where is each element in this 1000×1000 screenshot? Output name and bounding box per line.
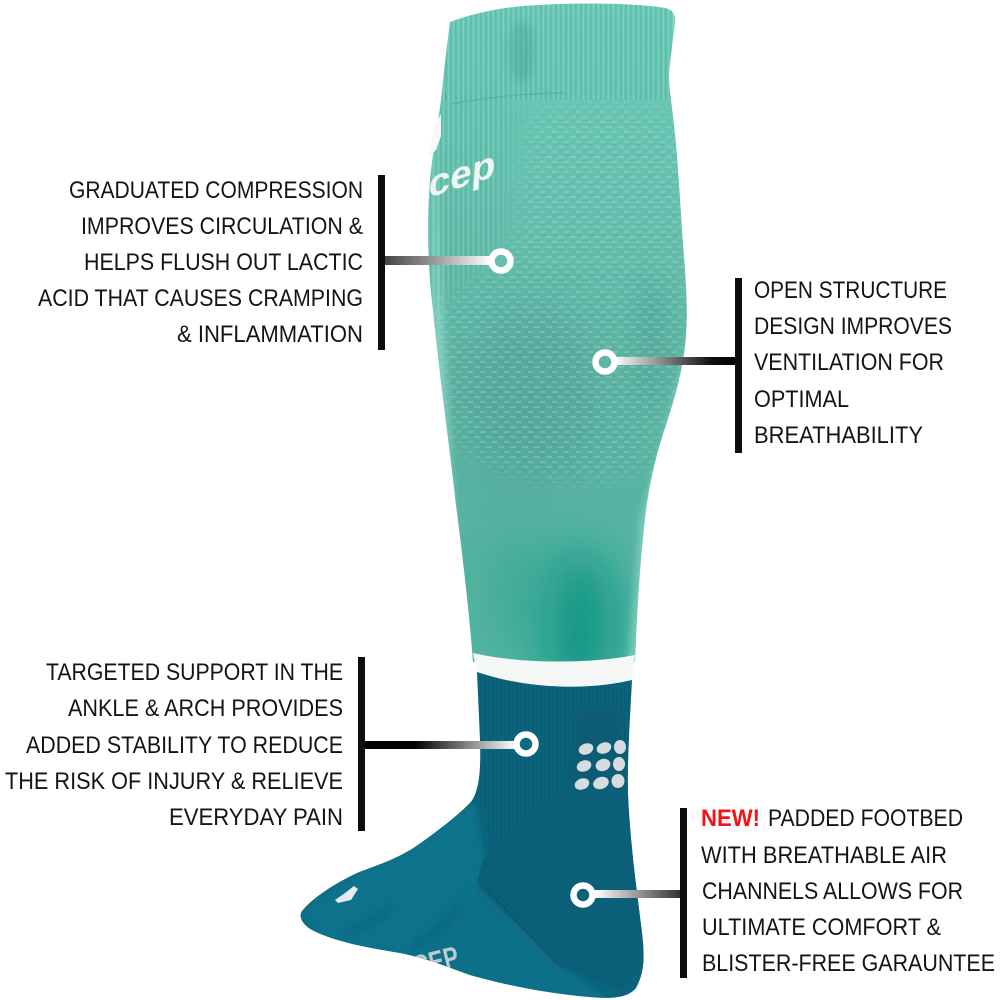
marker — [574, 886, 592, 904]
leader line — [614, 357, 735, 365]
callout text: OPEN STRUCTURE — [754, 277, 947, 304]
callout text: ADDED STABILITY TO REDUCE — [26, 732, 343, 759]
icon: toe mark — [335, 886, 358, 903]
callout text — [754, 277, 952, 449]
callout text: GRADUATED COMPRESSION — [69, 177, 363, 204]
callout: padded footbed — [574, 805, 995, 978]
callout text: & INFLAMMATION — [177, 321, 363, 348]
callout text: ACID THAT CAUSES CRAMPING — [38, 285, 363, 312]
callout text: VENTILATION FOR — [754, 349, 944, 376]
leader line — [365, 741, 516, 749]
callout text: HELPS FLUSH OUT LACTIC — [84, 249, 363, 276]
callout text: BREATHABILITY — [754, 422, 923, 449]
icon: dot logo on ankle — [573, 740, 626, 792]
callout text: PADDED FOOTBED — [768, 805, 963, 832]
callout text: ULTIMATE COMFORT & — [702, 914, 941, 941]
callout: graduated compression — [38, 175, 510, 350]
callout text: NEW! — [701, 805, 760, 832]
vertical bar — [680, 808, 687, 978]
callout text: OPTIMAL — [754, 386, 849, 413]
calf section of the sock — [428, 4, 687, 662]
callout text: TARGETED SUPPORT IN THE — [46, 659, 343, 686]
callout text: THE RISK OF INJURY & RELIEVE — [5, 768, 343, 795]
leader line — [385, 256, 492, 265]
vertical bar — [378, 175, 385, 350]
callout text: CHANNELS ALLOWS FOR — [702, 878, 963, 905]
vertical bar — [358, 657, 365, 831]
leader line — [595, 890, 680, 898]
callout text: ANKLE & ARCH PROVIDES — [68, 695, 343, 722]
foot section of the sock — [296, 672, 650, 1000]
callout text: WITH BREATHABLE AIR — [701, 842, 947, 869]
cuff logo mark — [429, 114, 441, 156]
cep logo: cep — [427, 141, 497, 206]
marker — [492, 252, 510, 270]
callout text — [5, 659, 343, 831]
callout text: DESIGN IMPROVES — [754, 313, 952, 340]
marker — [596, 352, 614, 372]
callout text: IMPROVES CIRCULATION & — [81, 213, 363, 240]
sock illustration — [296, 0, 710, 1000]
vertical bar — [735, 278, 742, 453]
sole lettering: CEP — [410, 941, 462, 984]
callout text — [38, 177, 363, 348]
white band — [473, 653, 635, 687]
callout: targeted support — [5, 657, 536, 831]
callout text — [701, 805, 995, 977]
callout text: EVERYDAY PAIN — [169, 804, 343, 831]
callout: open structure — [596, 277, 952, 453]
marker — [516, 734, 536, 754]
